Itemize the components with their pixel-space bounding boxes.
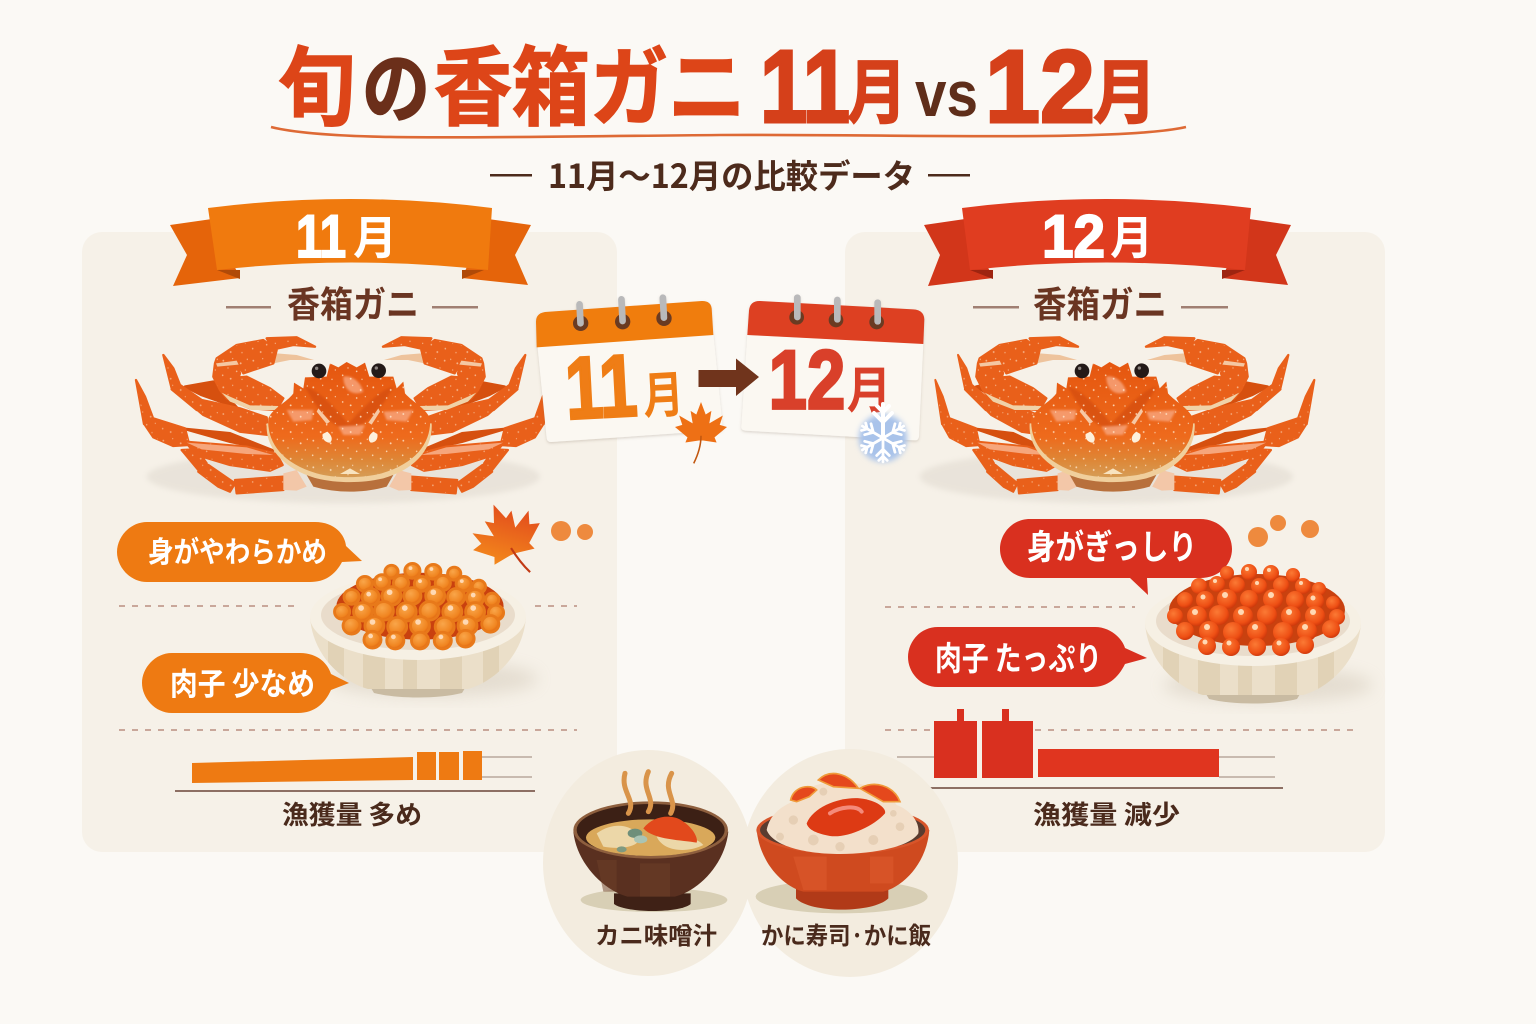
bubble: 身がやわらかめ: 身がやわらかめ xyxy=(148,529,327,571)
panel: December xyxy=(845,199,1385,852)
ribbon: 11月: 11 xyxy=(296,203,346,270)
catch bar: December xyxy=(897,709,1283,789)
title: 香箱ガニ xyxy=(434,18,746,143)
title xyxy=(278,18,1157,144)
ribbon: 12月: 12 xyxy=(1042,203,1105,270)
catch bar: November xyxy=(175,751,535,792)
title: 月 xyxy=(1093,37,1157,138)
label: カニ味噌汁: カニ味噌汁 xyxy=(595,916,717,951)
calendar: 12月: 12 xyxy=(769,334,845,427)
bubble: 肉子 たっぷり xyxy=(908,627,1147,687)
heading: 香箱ガニ: 香箱ガニ xyxy=(287,276,419,328)
roe dots xyxy=(1248,515,1319,547)
title: 12 xyxy=(985,29,1095,144)
roe bowl: plenty xyxy=(1145,564,1373,704)
title: 旬 xyxy=(278,18,355,143)
dashed divider xyxy=(119,606,577,730)
label: 漁獲量 減少: 漁獲量 減少 xyxy=(1033,795,1180,832)
label: 漁獲量 多め: 漁獲量 多め xyxy=(282,795,422,832)
calendar: 12月: 月 xyxy=(847,351,891,423)
icon: snowflake xyxy=(859,404,907,462)
roe dots xyxy=(551,521,593,541)
title: 11 xyxy=(760,29,850,144)
calendar: 11月: 月 xyxy=(641,355,685,429)
bubble: 肉子 たっぷり: 肉子 たっぷり xyxy=(935,632,1102,680)
label: かに寿司・かに飯: かに寿司·かに飯 xyxy=(761,916,931,951)
dish: crab miso soup xyxy=(543,750,753,976)
ribbon: 12月: 月 xyxy=(1110,202,1153,268)
soup bowl xyxy=(573,772,728,912)
bubble: 身がぎっしり xyxy=(1000,519,1232,595)
icon: maple leaf xyxy=(460,491,555,589)
ribbon: 11月 xyxy=(170,199,531,286)
crab illustration: December xyxy=(920,337,1314,503)
roe bowl: few xyxy=(310,563,538,698)
bubble: 肉子 少なめ xyxy=(142,653,349,713)
title: vs xyxy=(915,58,978,130)
calendar: 11月 xyxy=(536,294,723,442)
title: 月 xyxy=(847,37,907,138)
bubble: 肉子 少なめ: 肉子 少なめ xyxy=(170,659,315,704)
arrow xyxy=(698,358,759,396)
bubble: 身がぎっしり: 身がぎっしり xyxy=(1027,520,1197,569)
rice bowl xyxy=(756,774,929,913)
panel: November xyxy=(82,199,617,852)
calendar: 12月 xyxy=(741,294,924,440)
icon: maple leaf on calendar xyxy=(675,402,727,463)
ribbon: 11月: 月 xyxy=(353,202,397,268)
bubble: 身がやわらかめ xyxy=(117,522,362,582)
title: の xyxy=(362,27,430,139)
ribbon: 12月 xyxy=(924,199,1291,286)
heading: 香箱ガニ: 香箱ガニ xyxy=(1033,276,1167,328)
dish: crab sushi rice xyxy=(742,749,958,977)
calendar: 11月: 11 xyxy=(563,335,639,438)
crab illustration: November xyxy=(136,337,551,503)
title underline xyxy=(271,127,1186,137)
subtitle: 11月〜12月の比較データ xyxy=(548,150,915,198)
dashed divider xyxy=(885,607,1355,730)
